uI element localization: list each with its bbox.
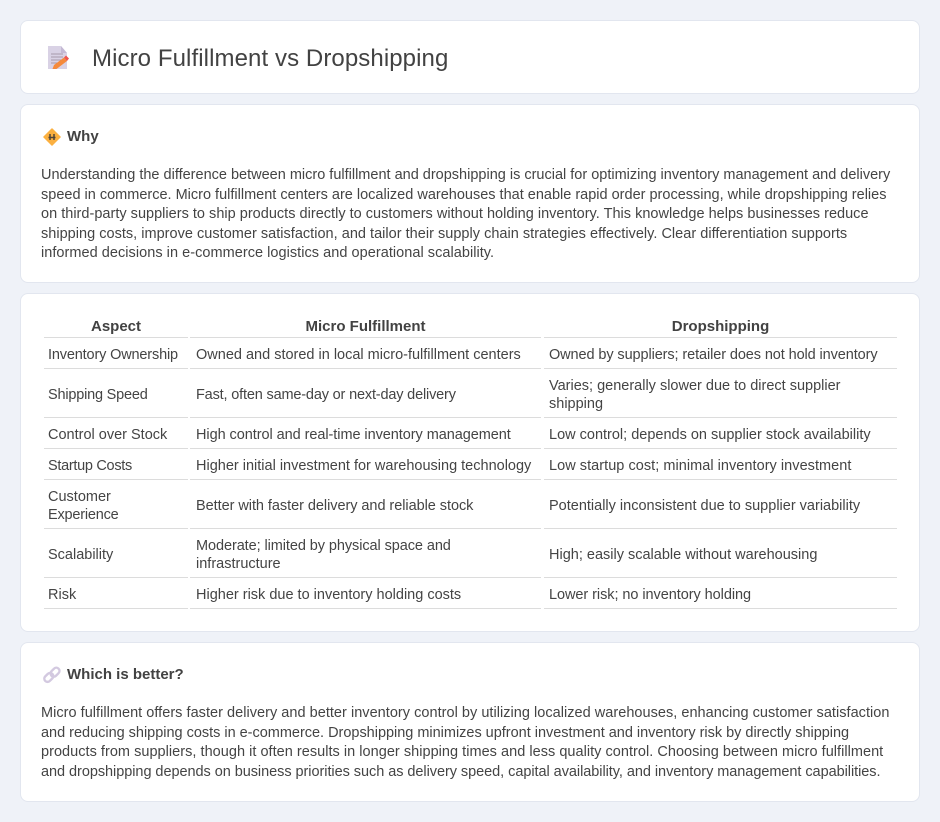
icon: document with pencil — [48, 46, 69, 69]
comparison table: shipping — [549, 396, 603, 412]
comparison table: Moderate; limited by physical space and — [196, 538, 451, 554]
text block: which is better: products from suppliers, though it often results in longer shipping times and less quality control. Choosing between micro fulfillment — [41, 744, 883, 760]
text block: why: on third-party suppliers to ship products directly to customers without holding inventory. This knowledge helps businesses reduce — [41, 206, 869, 222]
text block: why — [41, 167, 890, 261]
comparison table: Experience — [48, 507, 119, 523]
panel: comparison table card — [20, 293, 920, 632]
comparison table: Control over Stock — [48, 427, 167, 443]
comparison table: Higher risk due to inventory holding costs — [196, 587, 461, 603]
column header: Micro Fulfillment: Micro Fulfillment — [306, 318, 426, 335]
comparison table: Low control; depends on supplier stock availability — [549, 427, 871, 443]
comparison table: Higher initial investment for warehousing technology — [196, 458, 531, 474]
title: Micro Fulfillment vs Dropshipping — [92, 45, 448, 72]
comparison table: Better with faster delivery and reliable stock — [196, 498, 473, 514]
comparison table: Varies; generally slower due to direct supplier — [549, 378, 840, 394]
text block: which is better: Micro fulfillment offers faster delivery and better inventory control by utilizing localized warehouses, enhancing customer satisfaction — [41, 705, 889, 721]
comparison table: Shipping Speed — [48, 387, 148, 403]
comparison table: Lower risk; no inventory holding — [549, 587, 751, 603]
panel: why — [20, 104, 920, 283]
comparison table: High; easily scalable without warehousing — [549, 547, 817, 563]
panel: title card — [20, 20, 920, 94]
text block: which is better: and reducing shipping costs in e-commerce. Dropshipping minimizes upfront investment and inventory risk by directly shipping — [41, 725, 849, 741]
comparison table: Risk — [48, 587, 76, 603]
column header: Aspect: Aspect — [91, 318, 141, 335]
icon: link — [43, 666, 61, 683]
column header: Dropshipping: Dropshipping — [672, 318, 769, 335]
comparison table: Owned by suppliers; retailer does not hold inventory — [549, 347, 878, 363]
text block: which is better: and dropshipping depends on business priorities such as delivery speed, capital availability, and inventory management capabilities. — [41, 764, 880, 780]
text block: why: speed in commerce. Micro fulfillment centers are localized warehouses that enable rapid order processing, while dropshipping relies — [41, 187, 886, 203]
heading: which is better: Which is better? — [67, 666, 184, 683]
text block: why: shipping costs, improve customer satisfaction, and tailor their supply chain strategies effectively. Clear differentiation supports — [41, 226, 847, 242]
comparison table: infrastructure — [196, 556, 281, 572]
text block: why: Understanding the difference between micro fulfillment and dropshipping is crucial for optimizing inventory management and delivery — [41, 167, 890, 183]
panel: which is better — [20, 642, 920, 802]
comparison table: Inventory Ownership — [48, 347, 178, 363]
text block: why: informed decisions in e-commerce logistics and operational scalability. — [41, 245, 494, 261]
comparison table: Low startup cost; minimal inventory investment — [549, 458, 851, 474]
comparison table: Scalability — [48, 547, 113, 563]
comparison table: Fast, often same-day or next-day delivery — [196, 387, 456, 403]
icon: warning diamond — [43, 128, 61, 146]
heading: why: Why — [67, 128, 99, 145]
text block: which is better — [41, 705, 889, 780]
comparison table: Customer — [48, 489, 111, 505]
comparison table: Potentially inconsistent due to supplier variability — [549, 498, 860, 514]
comparison table: Startup Costs — [48, 458, 132, 474]
comparison table: High control and real-time inventory management — [196, 427, 511, 443]
comparison table: Owned and stored in local micro-fulfillment centers — [196, 347, 521, 363]
comparison table — [44, 318, 897, 609]
